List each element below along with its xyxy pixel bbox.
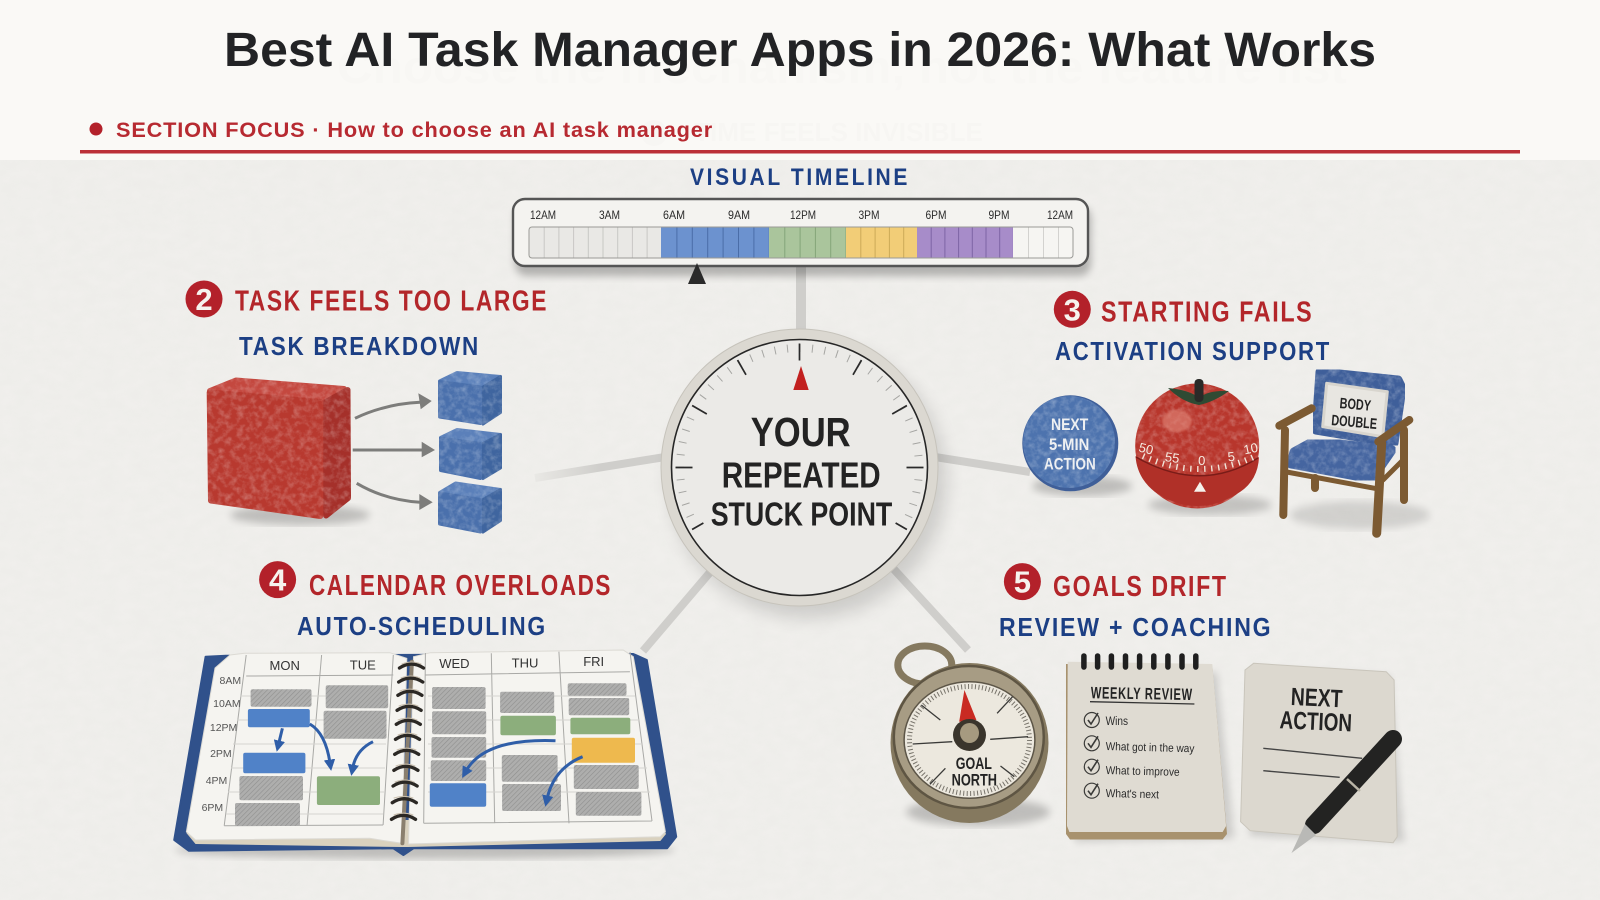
spiral binding	[392, 662, 424, 843]
dial red marker	[793, 366, 809, 390]
planner cover	[174, 654, 676, 855]
right page	[408, 650, 665, 844]
planner time labels: 10AM	[213, 698, 241, 710]
badge 4: 4	[269, 563, 287, 598]
badge 5	[1004, 563, 1041, 600]
dial major ticks	[676, 344, 924, 530]
notepad heading: WEEKLY REVIEW	[1091, 684, 1193, 704]
icon: tomato timer: 55	[1164, 449, 1181, 466]
timeline hour labels: 9PM	[988, 210, 1010, 222]
icon: next action button: NEXT	[1051, 416, 1088, 434]
left page	[186, 653, 407, 843]
icon: tomato timer: 5	[1227, 449, 1236, 464]
badge 3	[1054, 291, 1091, 328]
icon: body double chair: DOUBLE	[1331, 412, 1378, 433]
timeline hour labels: 12AM	[1047, 210, 1073, 222]
heading: TASK FEELS TOO LARGE	[235, 286, 548, 318]
title: Best AI Task Manager Apps in 2026: What Works	[224, 24, 1376, 77]
icon: tomato timer: 50	[1137, 440, 1155, 458]
arrows to small blocks	[353, 393, 435, 510]
planner page stack	[186, 820, 666, 847]
busy blocks	[235, 683, 641, 826]
scheduled yellow block	[572, 738, 635, 763]
icon: next action card	[1241, 663, 1404, 853]
planner time labels: 6PM	[202, 802, 223, 814]
icon: next action card: ACTION	[1279, 706, 1353, 737]
timeline hour labels: 3PM	[858, 210, 880, 222]
dial label: YOUR	[751, 409, 851, 455]
planner grid	[224, 652, 652, 826]
subheading: AUTO-SCHEDULING	[297, 611, 547, 641]
heading: GOALS DRIFT	[1053, 571, 1228, 603]
planner time labels: 2PM	[210, 748, 232, 760]
checklist: Wins	[1106, 716, 1128, 728]
icon: tomato timer: 10	[1242, 440, 1259, 457]
icon: tomato timer	[1135, 379, 1272, 515]
planner day labels: TUE	[350, 658, 376, 673]
icon: body double chair	[1279, 372, 1430, 533]
subheading: ACTIVATION SUPPORT	[1055, 336, 1331, 366]
panel: calendar overloads	[174, 561, 676, 859]
timeline hour labels: 9AM	[728, 210, 750, 222]
faded subtitle behind header: Choose the mechanism, not the feature list	[337, 41, 1347, 93]
panel: task feels too large	[186, 280, 548, 532]
panel: goals drift	[890, 563, 1404, 853]
planner day labels	[270, 654, 604, 673]
panel: visual timeline	[513, 199, 1091, 276]
icon: next action button: ACTION	[1044, 455, 1096, 473]
badge 5: 5	[1014, 565, 1031, 600]
timeline colored bar	[529, 227, 1073, 258]
visual timeline heading: VISUAL TIMELINE	[690, 164, 910, 191]
badge 4	[259, 561, 296, 598]
planner time labels	[202, 675, 241, 814]
reschedule arrows	[279, 724, 583, 799]
checklist: What's next	[1106, 788, 1160, 801]
icon: goal compass	[890, 646, 1050, 826]
icon: small blue blocks	[440, 372, 500, 532]
planner time labels: 12PM	[210, 722, 237, 734]
dial label: STUCK POINT	[711, 497, 893, 534]
checklist: What got in the way	[1106, 741, 1195, 755]
central dial	[661, 329, 946, 618]
timeline hour labels: 6PM	[926, 210, 946, 222]
timeline hour labels	[530, 210, 1073, 222]
icon: goal compass: GOAL	[956, 754, 992, 773]
scheduled blue blocks	[243, 709, 486, 807]
subheading: TASK BREAKDOWN	[239, 331, 480, 361]
subheading: REVIEW + COACHING	[999, 612, 1272, 642]
dial label: REPEATED	[722, 454, 881, 495]
badge 3: 3	[1064, 292, 1081, 327]
spiral rings	[1084, 656, 1196, 667]
section focus label: SECTION FOCUS · How to choose an AI task manager	[116, 119, 713, 142]
badge 2	[186, 280, 222, 318]
planner day labels: FRI	[583, 654, 604, 669]
timeline hour labels: 12PM	[790, 210, 816, 222]
icon: tomato timer: 0	[1198, 453, 1205, 468]
faded label behind header: TIME FEELS INVISIBLE	[694, 117, 983, 147]
icon: goal compass: NORTH	[952, 771, 997, 790]
planner day labels: MON	[270, 658, 300, 673]
timeline hour labels: 3AM	[599, 210, 620, 222]
checklist: What to improve	[1106, 765, 1180, 779]
timeline hour labels: 12AM	[530, 210, 556, 222]
icon: next action card: NEXT	[1290, 683, 1343, 713]
timeline pointer	[688, 263, 706, 284]
icon: weekly review notepad	[1066, 656, 1234, 842]
icon: next action button	[1022, 395, 1132, 496]
panel: starting fails	[1022, 291, 1430, 533]
planner time labels: 4PM	[206, 775, 227, 787]
checklist	[1084, 712, 1195, 801]
heading: STARTING FAILS	[1101, 297, 1313, 329]
icon: body double chair: BODY	[1339, 395, 1372, 415]
planner day labels: WED	[439, 656, 470, 671]
icon: large red block	[210, 380, 370, 525]
connector spokes	[535, 265, 1030, 651]
icon: pen	[1292, 739, 1393, 853]
header rule	[80, 150, 1520, 154]
badge 2: 2	[195, 282, 213, 317]
heading: CALENDAR OVERLOADS	[309, 570, 612, 602]
header band	[0, 0, 1600, 160]
dial label	[711, 409, 893, 534]
timeline hour labels: 6AM	[663, 210, 685, 222]
planner time labels: 8AM	[220, 675, 241, 687]
scheduled green blocks	[317, 716, 630, 805]
icon: next action button: 5-MIN	[1049, 436, 1089, 454]
planner day labels: THU	[512, 656, 538, 670]
section focus bullet	[90, 122, 102, 136]
planner book	[174, 650, 676, 859]
